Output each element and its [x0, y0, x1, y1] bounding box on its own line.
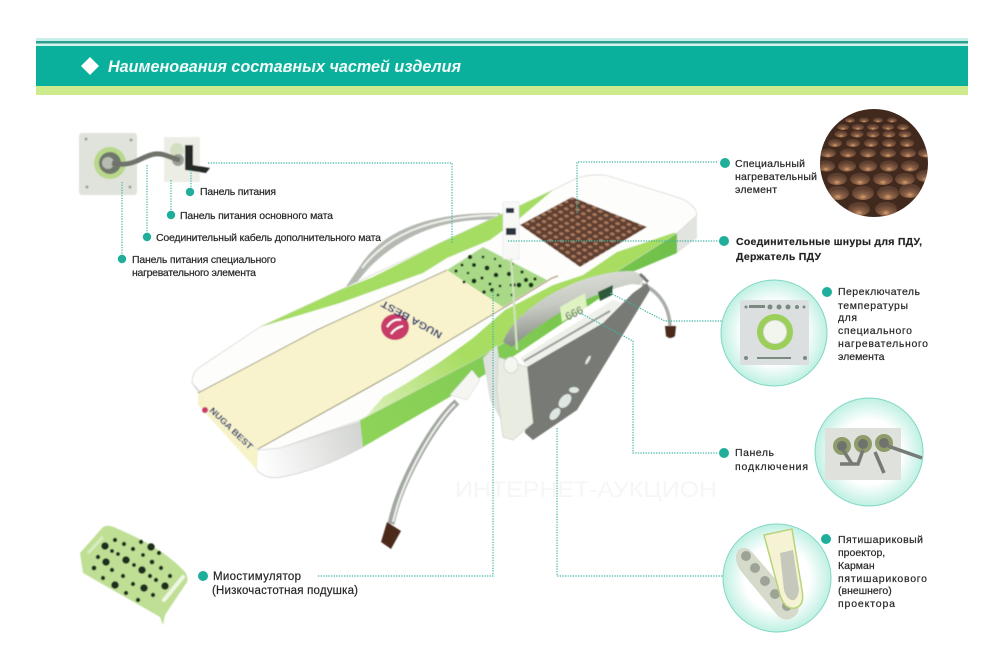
circle photo: heating element	[817, 109, 936, 217]
cream mattress	[198, 270, 505, 449]
label: additional mat cable: Соединительный кабель дополнительного мата	[156, 232, 381, 244]
back green stripe	[260, 190, 553, 327]
label: power panel: Панель питания	[200, 186, 276, 198]
five ball projector	[497, 357, 533, 440]
label: five-ball projector: проектор,	[838, 547, 885, 559]
large plate	[79, 133, 137, 195]
green side panel	[360, 233, 677, 447]
dark connector block	[598, 285, 613, 301]
bed rear leg	[642, 284, 670, 328]
far hand rail	[345, 213, 500, 288]
label: five-ball projector	[821, 534, 927, 610]
label: remote cords and holder	[719, 236, 922, 263]
projector pocket	[764, 529, 803, 608]
bed front end	[192, 383, 363, 478]
remote control	[503, 202, 519, 259]
cream end face	[198, 393, 258, 470]
translucent pouch backing	[483, 345, 512, 440]
label: myostimulator: Миостимулятор	[213, 571, 301, 583]
front green crescent	[360, 233, 677, 420]
label: special heating element: Специальный	[735, 158, 805, 170]
label: temperature switch: специального	[838, 325, 912, 337]
label: special heating element power panel: Панель питания специального	[132, 254, 276, 266]
projector	[736, 548, 799, 620]
label: connection panel: Панель	[735, 447, 775, 459]
bed rear foot	[665, 326, 676, 338]
label: temperature switch: нагревательного	[838, 338, 928, 350]
front leg	[391, 402, 457, 524]
bed top surface	[192, 175, 697, 450]
power panels illustration	[79, 133, 210, 195]
bed end logo: NUGA BEST	[208, 405, 255, 452]
small plate	[164, 137, 200, 182]
illustration: massage bed	[192, 175, 697, 549]
label: five-ball projector: (внешнего)	[838, 585, 892, 597]
circle photo: connection panel	[815, 398, 923, 506]
connector lines	[122, 162, 723, 576]
label: myostimulator: (Низкочастотная подушка)	[212, 585, 358, 597]
connecting cable	[112, 154, 180, 164]
label: myostimulator	[198, 571, 358, 597]
label: connection panel	[719, 447, 808, 473]
circle photo: five-ball projector	[723, 524, 831, 632]
circle photo: temperature switch	[721, 280, 827, 386]
label: temperature switch: Переключатель	[838, 286, 921, 298]
label: special heating element power panel	[118, 254, 276, 279]
label: five-ball projector: Пятишариковый	[838, 534, 923, 546]
white leg mount	[450, 370, 480, 400]
label: temperature switch	[822, 286, 928, 363]
label: connection panel: подключения	[735, 461, 808, 473]
low frequency cushion on bed	[447, 247, 558, 307]
header band	[36, 38, 968, 95]
gray side panel	[525, 283, 650, 440]
label: main mat power panel: Панель питания основного мата	[180, 210, 333, 222]
label: special heating element power panel: нагревательного элемента	[132, 267, 256, 279]
label: temperature switch: для	[838, 312, 857, 324]
label: special heating element: нагревательный	[735, 171, 817, 183]
label: remote cords and holder: Держатель ПДУ	[736, 251, 821, 263]
label: temperature switch: температуры	[838, 300, 908, 312]
illustration: low frequency cushion	[80, 526, 188, 625]
heating element mat	[520, 197, 647, 267]
black plug	[185, 145, 210, 173]
label: temperature switch: элемента	[838, 351, 885, 363]
label: five-ball projector: Карман	[838, 560, 875, 572]
front foot	[381, 522, 401, 549]
panel flowers	[547, 355, 592, 422]
label: five-ball projector: пятишарикового	[838, 573, 927, 585]
connection label on bed	[560, 293, 587, 323]
remote control cord	[511, 258, 517, 350]
bed logo: NUGA BEST	[380, 297, 444, 340]
title: Наименования составных частей изделия	[108, 57, 461, 76]
connection label on bed: 666	[564, 304, 585, 323]
label: special heating element	[720, 158, 817, 196]
label: special heating element: элемент	[735, 184, 777, 196]
watermark: ИНТЕРНЕТ-АУКЦИОН	[455, 477, 717, 502]
label: five-ball projector: проектора	[838, 598, 895, 610]
white band above panel	[520, 300, 622, 367]
near hand rail	[503, 271, 646, 347]
label: remote cords and holder: Соединительные шнуры для ПДУ,	[736, 236, 922, 248]
bed head end	[677, 215, 697, 253]
